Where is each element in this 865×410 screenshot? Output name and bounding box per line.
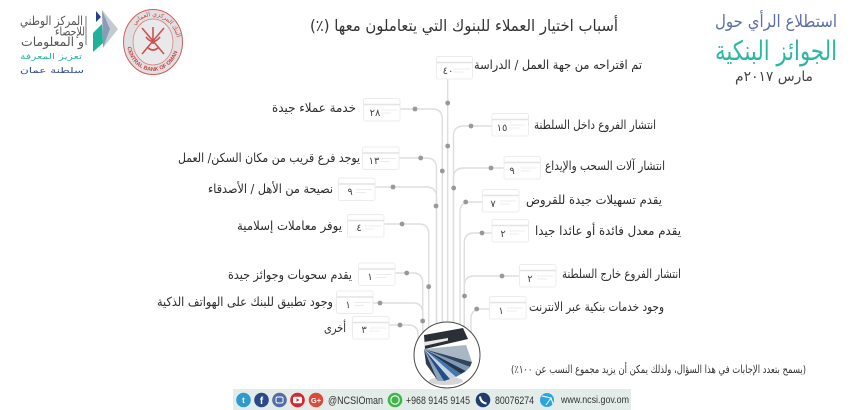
item: 3 other: أخرى	[324, 319, 346, 336]
item: 4: ٤	[356, 223, 362, 234]
item: 15: انتشار الفروع داخل السلطنة	[534, 117, 656, 133]
icon: google plus: G+	[311, 396, 322, 405]
item: 1 sweepstakes: ١	[367, 272, 373, 283]
logo: NCSI: و المعلومات	[21, 34, 84, 50]
item: 15	[492, 114, 656, 136]
icon: twitter: t	[242, 396, 245, 405]
icon: phone	[476, 393, 490, 407]
icon: youtube	[290, 393, 305, 407]
item: 1 online: ١	[498, 306, 504, 317]
logo: Central Bank of Oman seal: CENTRAL BANK OF OMAN	[128, 46, 178, 71]
logo: NCSI: المركز الوطني	[20, 13, 83, 29]
icon: bank cards	[414, 322, 480, 388]
icon: instagram	[272, 393, 287, 407]
item: 7: يقدم تسهيلات جيدة للقروض	[526, 192, 662, 208]
icon: twitter	[236, 393, 251, 407]
item: 1 mobile app: وجود تطبيق للبنك على الهواتف الذكية	[157, 294, 333, 310]
item: 2 interest	[492, 220, 681, 242]
item: 4	[237, 214, 384, 237]
heading: survey header: مارس ٢٠١٧م	[735, 69, 813, 85]
item: 9	[208, 178, 375, 200]
item: 2 abroad: انتشار الفروع خارج السلطنة	[562, 266, 681, 282]
item: 1 sweepstakes: يقدم سحوبات وجوائز جيدة	[228, 267, 352, 283]
icon: whatsapp	[388, 393, 402, 407]
item: 2 interest: يقدم معدل فائدة أو عائدا جيدا	[535, 222, 681, 239]
item: 13: ١٣	[369, 156, 380, 167]
item: 2 abroad: ٢	[527, 274, 533, 285]
item: 1 mobile app: ١	[345, 300, 351, 311]
item: 40: تم اقتراحه من جهة العمل / الدراسة	[474, 57, 642, 73]
icon: google plus	[309, 393, 323, 407]
heading: survey header	[715, 10, 837, 85]
item: 28	[272, 98, 400, 121]
item: 1 online: وجود خدمات بنكية عبر الانترنت	[529, 299, 664, 315]
footer: contact bar	[233, 389, 631, 410]
item: 9 ATMs: انتشار آلات السحب والإيداع	[545, 158, 665, 174]
logo: NCSI: للإحصاء	[55, 24, 85, 38]
item: 9: نصيحة من الأهل / الأصدقاء	[208, 181, 333, 197]
item: 3 other: ٣	[361, 325, 367, 336]
logo: NCSI	[20, 10, 118, 75]
item: 4: يوفر معاملات إسلامية	[237, 218, 342, 234]
item: 9 ATMs: ٩	[509, 166, 515, 177]
item: 9 ATMs	[504, 156, 665, 179]
logo: Central Bank of Oman seal	[123, 9, 183, 75]
item: 15: ١٥	[497, 123, 507, 134]
item: 2 abroad	[520, 264, 681, 287]
phone number: +968 9145 9145	[406, 395, 470, 407]
logo: Central Bank of Oman seal: البنك المركزي العماني	[134, 12, 182, 37]
item: 1 mobile app	[157, 291, 373, 314]
connector lines	[373, 79, 519, 342]
icon: facebook	[254, 393, 269, 407]
item: 1 online	[490, 296, 664, 319]
item: 40: ٤٠	[443, 66, 453, 77]
item: 3 other	[324, 316, 389, 339]
item: 13	[178, 147, 399, 170]
icon: globe	[540, 393, 554, 407]
title: أسباب اختيار العملاء للبنوك التي يتعاملون معها (٪)	[310, 15, 618, 36]
icon: facebook: f	[260, 396, 264, 407]
logo: NCSI: سلطنة عمان	[20, 66, 84, 75]
heading: survey header: استطلاع الرأي حول	[715, 10, 837, 32]
item: 28: خدمة عملاء جيدة	[272, 100, 356, 115]
item: 2 interest: ٢	[500, 229, 506, 240]
logo: NCSI: تعزيز المعرفة	[20, 52, 82, 61]
website: www.ncsi.gov.om	[560, 395, 629, 406]
item: 9: ٩	[347, 187, 353, 198]
toll free number: 80076274	[495, 395, 534, 407]
item: 7: ٧	[490, 199, 496, 210]
item: 40	[436, 56, 642, 79]
handle: @NCSIOman	[328, 395, 383, 407]
item: 13: يوجد فرع قريب من مكان السكن/ العمل	[178, 150, 360, 166]
item: 7	[482, 190, 662, 212]
item: 1 sweepstakes	[228, 263, 395, 286]
item: 28: ٢٨	[370, 108, 381, 119]
